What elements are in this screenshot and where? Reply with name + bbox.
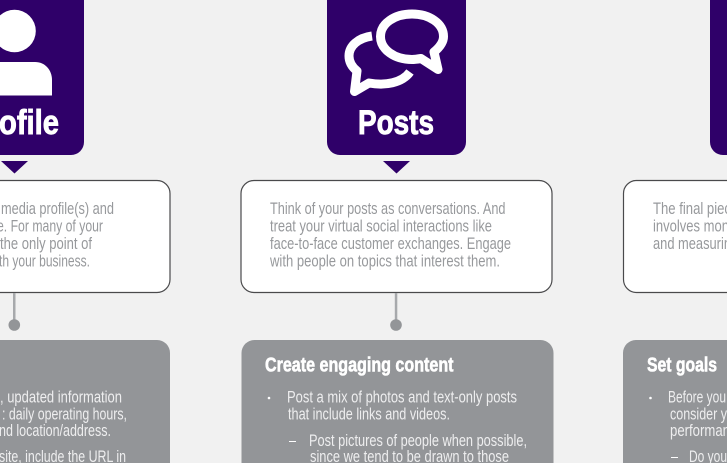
header tab: profile bbox=[0, 0, 84, 155]
panel heading: create engaging content: Create engaging content bbox=[265, 355, 454, 377]
heading: posts: Posts bbox=[358, 104, 434, 142]
header tab: goals bbox=[710, 0, 727, 155]
bullet item: post a mix: that include links and videos. bbox=[288, 404, 450, 423]
text box: profile intro: the only point of bbox=[0, 234, 92, 253]
text box: posts intro: treat your virtual social interactions like bbox=[270, 216, 492, 236]
bullet item: before you bbox=[649, 388, 727, 440]
arrow: profile down bbox=[1, 161, 28, 174]
text box: profile intro bbox=[0, 180, 170, 292]
connector: posts bbox=[390, 293, 402, 331]
column: posts bbox=[241, 0, 554, 463]
sub-bullet item: post pictures bbox=[289, 431, 527, 463]
detail panel: profile: , updated information bbox=[0, 388, 122, 407]
detail panel: profile: : daily operating hours, bbox=[2, 404, 127, 423]
detail panel: profile: nd location/address. bbox=[0, 421, 111, 440]
text box: posts intro: with people on topics that interest them. bbox=[269, 251, 500, 270]
heading: profile: ofile bbox=[0, 104, 59, 142]
icon: person bbox=[0, 10, 52, 96]
detail panel: posts bbox=[242, 340, 554, 463]
text box: posts intro: Think of your posts as conversations. And bbox=[270, 199, 506, 218]
text box: posts intro: face-to-face customer exchanges. Engage bbox=[270, 234, 511, 253]
text box: profile intro: th your business. bbox=[0, 251, 90, 270]
detail panel: goals bbox=[623, 340, 727, 463]
text box: profile intro: media profile(s) and bbox=[1, 199, 114, 218]
bullet item: post a mix: Post a mix of photos and text-only posts bbox=[287, 388, 517, 407]
arrow: posts down bbox=[383, 161, 410, 174]
column: goals bbox=[623, 0, 727, 463]
column: profile bbox=[0, 0, 170, 463]
icon: speech bubbles bbox=[349, 14, 444, 92]
text box: profile intro: e. For many of your bbox=[0, 216, 103, 236]
text box: posts intro bbox=[241, 180, 552, 292]
sub-bullet item: post pictures: Post pictures of people when possible, bbox=[309, 431, 527, 450]
detail panel: profile bbox=[0, 340, 170, 463]
connector: profile bbox=[8, 293, 20, 331]
bullet item: post a mix bbox=[268, 388, 517, 423]
header tab: posts bbox=[327, 0, 466, 155]
text box: goals intro bbox=[624, 180, 727, 292]
